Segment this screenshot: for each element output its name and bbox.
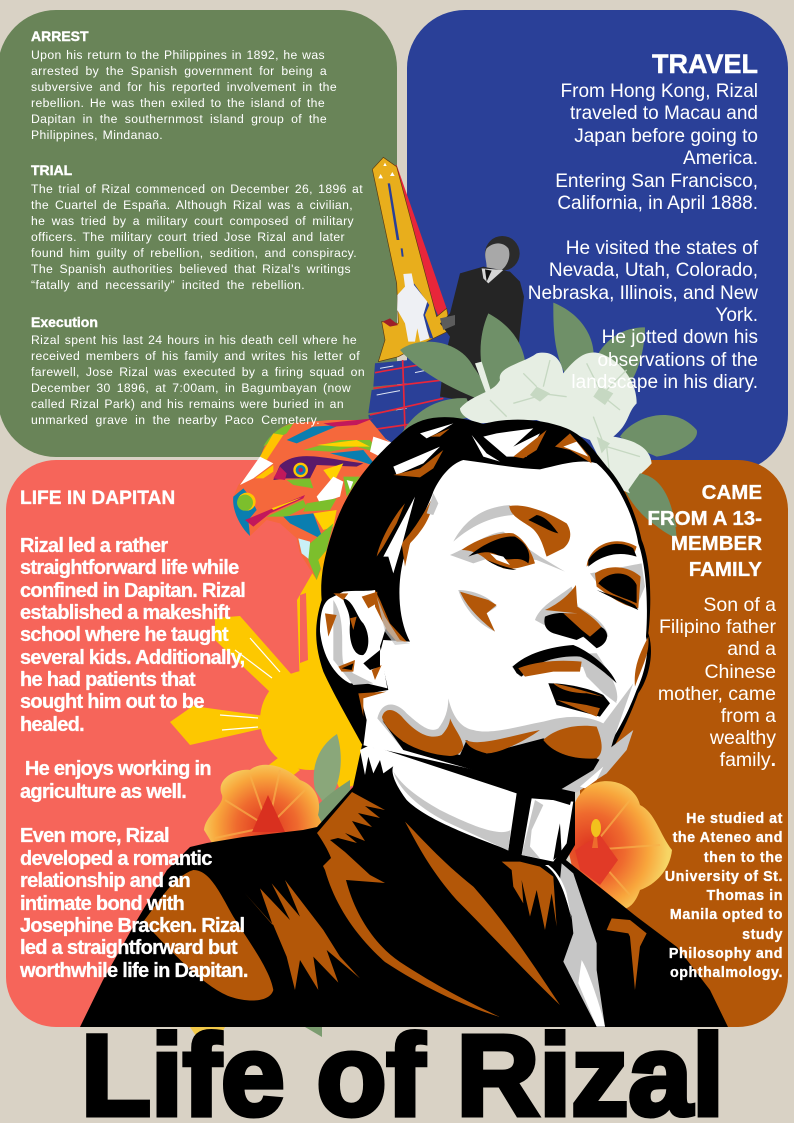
face white [360,460,647,777]
icon: photo of man looking up [440,236,524,403]
text block: travel: landscape in his diary. [571,372,758,393]
icon: Philippine sun [170,560,400,790]
text block: travel: He jotted down his [602,327,758,348]
panel: life in Dapitan [6,460,426,1027]
text block: family: family. [720,749,776,771]
text block: travel [528,81,758,393]
jacket: tuft beside tie [502,862,557,930]
jacket: jagged fold [245,880,360,990]
text block: life in Dapitan: worthwhile life in Dapitan. [20,960,248,982]
text block: life in Dapitan: confined in Dapitan. Rizal [20,580,245,602]
text block: family: Filipino father [659,616,776,638]
text block: travel: Japan before going to [574,126,758,147]
text block: life in Dapitan: several kids. Additionally, [20,647,245,669]
text block: travel: observations of the [597,350,758,371]
text block: education: Manila opted to [670,907,783,923]
text block: family: mother, came [658,683,776,705]
illustration: jaw and neck [377,683,633,797]
icon: white flowers and green leaves [400,303,697,530]
text block: execution: unmarked grave in the nearby Paco Cemetery. [31,413,320,427]
text block: travel: York. [715,305,758,326]
text block: trial: The trial of Rizal commenced on December 26, 1896 at [31,182,363,196]
text block: trial: officers. The military court tried Jose Rizal and later [31,230,345,244]
brow and cheek brown [460,506,649,687]
text block: trial: the Cuartel de España. Although Rizal was a civilian, [31,198,353,212]
text block: family: from a [721,705,776,727]
text block: travel: traveled to Macau and [570,103,758,124]
illustration: ear [320,590,410,717]
text block: family: and a [727,638,776,660]
heading: execution: Execution [31,314,98,330]
text block: execution: received members of his family and writes his letter of [31,349,360,363]
heading: travel: TRAVEL [652,49,758,79]
icon: right hibiscus [566,781,672,909]
text block: life in Dapitan: healed. [20,714,84,736]
text block: life in Dapitan: agriculture as well. [20,781,186,803]
text block: execution: December 30 1896, at 7:00am, in Bagumbayan (now [31,381,351,395]
jacket: left lapel [317,792,500,1017]
heading: family: MEMBER [671,532,762,555]
text block: life in Dapitan: intimate bond with [20,892,184,914]
text block: trial: The Spanish authorities believed that Rizal's writings [31,262,351,276]
text block: arrest: arrested by the Spanish government for being a [31,64,327,78]
jacket: shoulder crescent [143,870,273,1001]
panel: travel [407,10,788,472]
icon: leaf over right hand panel [628,473,677,538]
text block: trial: found him guilty of rebellion, sedition, and conspiracy. [31,246,357,260]
text block: education: Thomas in [707,888,783,904]
text block: arrest: rebellion. He was then exiled to the island of the [31,96,325,110]
text block: arrest: subversive and for his reported involvement in the [31,80,337,94]
illustration: jacket, collar and tie [80,745,728,1027]
text block: life in Dapitan: established a makeshift [20,602,230,624]
icon: left hibiscus [204,765,325,848]
text block: arrest [31,48,337,142]
shirt and tie [560,863,605,1027]
thin black seam [403,754,530,795]
left eye [462,533,535,569]
right eye [595,567,641,608]
text block: life in Dapitan: relationship and an [20,870,190,892]
text block: education: study [742,927,783,943]
text block: arrest: Philippines, Mindanao. [31,128,163,142]
text block: execution: called Rizal Park) and his remains were buried in an [31,397,344,411]
text block: travel: From Hong Kong, Rizal [561,81,758,102]
nose [544,613,607,648]
panel: family [580,460,788,1027]
text block: life in Dapitan: Josephine Bracken. Rizal [20,915,244,937]
heading: trial: TRIAL [31,162,72,178]
text block: trial [31,182,363,292]
head silhouette and hair [316,417,651,800]
text block: travel: Nebraska, Illinois, and New [528,283,758,304]
text block: travel: Nevada, Utah, Colorado, [549,260,758,281]
jaw brown [382,710,463,756]
heading: arrest: ARREST [31,28,89,44]
text block: arrest: Dapitan in the southernmost island group of the [31,112,327,126]
text block: travel: He visited the states of [566,238,758,259]
text block: life in Dapitan: He enjoys working in [25,758,211,780]
text block: execution: farewell, Jose Rizal was executed by a firing squad on [31,365,365,379]
heading: family: CAME [702,481,762,504]
text block: family: Son of a [703,594,776,616]
text block: education: Philosophy and [669,946,783,962]
text block: life in Dapitan: sought him out to be [20,691,204,713]
text block: education: ophthalmology. [670,965,783,981]
heading: life in Dapitan: LIFE IN DAPITAN [20,488,175,509]
text block: trial: he was tried by a military court composed of military [31,214,354,228]
mouth [513,645,617,683]
right neck highlight [560,730,633,797]
text block: life in Dapitan: developed a romantic [20,848,212,870]
centre collar [522,798,573,862]
panel: arrest, trial, execution [0,10,397,457]
text block: arrest: Upon his return to the Philippines in 1892, he was [31,48,325,62]
text block: execution [31,333,365,427]
text block: life in Dapitan: he had patients that [20,669,195,691]
icon: leaf by left hibiscus [310,734,350,825]
heading: family [647,481,762,581]
jacket silhouette [80,745,728,1027]
jaw grey highlight [377,683,633,763]
text block: life in Dapitan: straightforward life while [20,557,238,579]
icon: rainbow eagle [233,418,397,580]
text block: education: then to the [704,850,783,866]
text block: education: He studied at [686,811,783,827]
illustration: head and face [316,417,651,800]
text block: family: wealthy [710,727,776,749]
heading: family: FROM A 13- [647,507,762,530]
text block: education: the Ateneo and [673,830,783,846]
hair highlights [393,447,440,475]
face grey shading [450,505,645,702]
jacket: right shoulder mark [607,918,647,990]
left collar [370,745,517,850]
text block: life in Dapitan: Rizal led a rather [20,535,167,557]
text block: execution: Rizal spent his last 24 hours in his death cell where he [31,333,357,347]
text block: education [665,811,783,981]
text block: family: Chinese [704,661,776,683]
heading: family: FAMILY [689,558,762,581]
text block: travel: Entering San Francisco, [555,171,758,192]
icon: Rizal monument [368,157,451,450]
text block: life in Dapitan [20,535,248,982]
neck black mass [382,720,602,790]
text block: education: University of St. [665,869,783,885]
text block: trial: “fatally and necessarily” incited the rebellion. [31,278,305,292]
text block: life in Dapitan: school where he taught [20,624,228,646]
icon: stray petal under the title [190,1027,322,1040]
collar spikes [360,745,395,775]
text block: life in Dapitan: led a straightforward but [20,937,237,959]
text block: travel: America. [683,148,758,169]
jacket: right lapel [405,822,560,1005]
text block: travel: California, in April 1888. [557,193,758,214]
text block: family [658,594,776,771]
text block: life in Dapitan: Even more, Rizal [20,825,169,847]
